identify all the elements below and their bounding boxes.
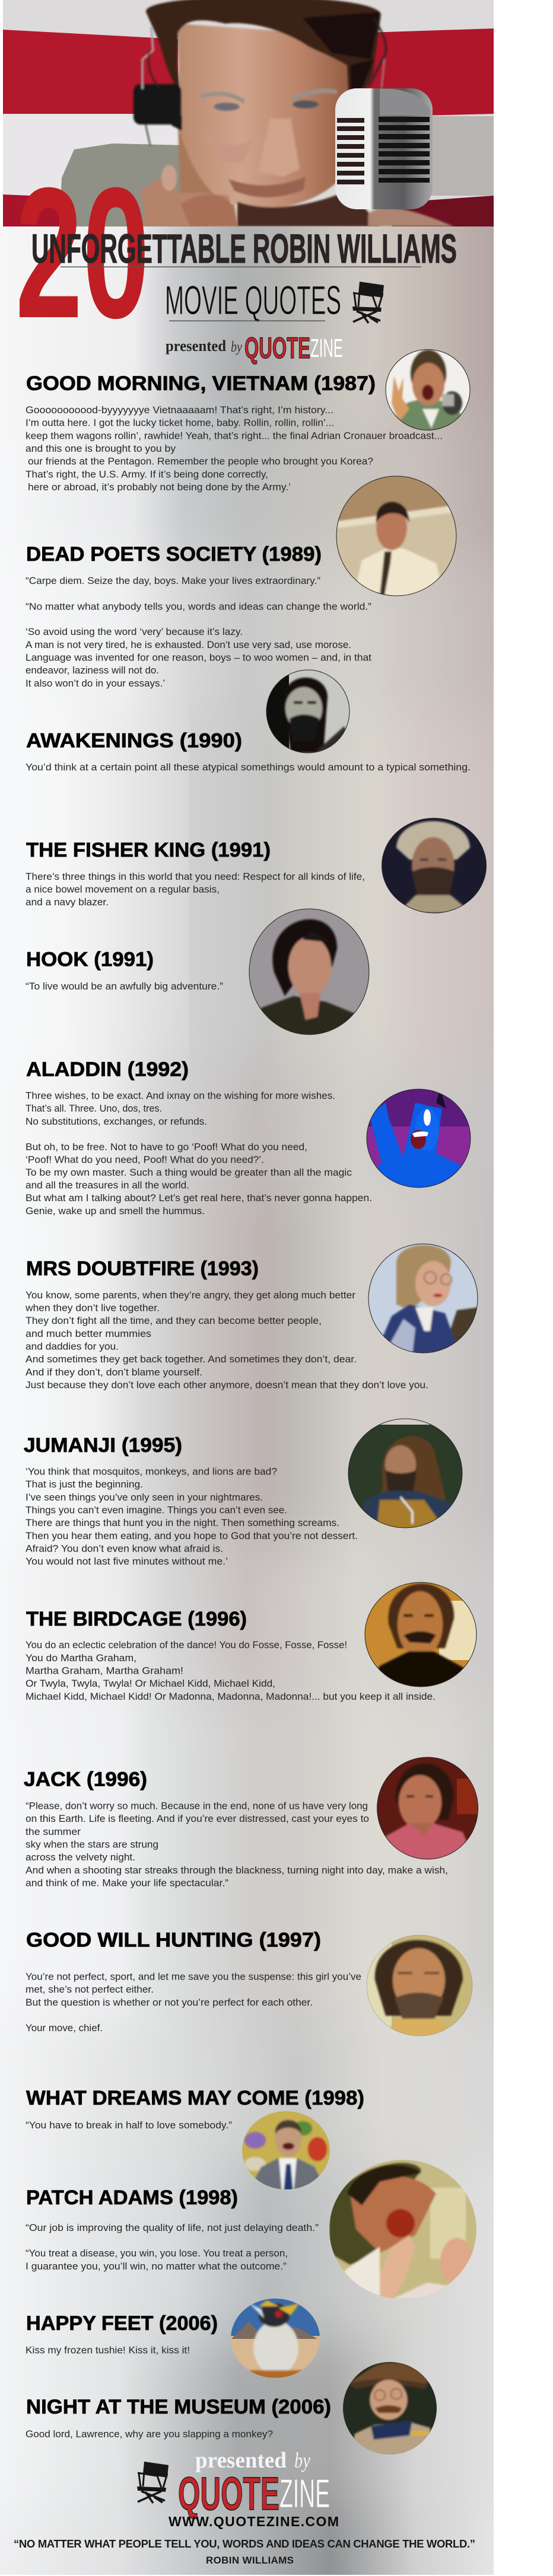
- quote text: [26, 1466, 358, 1567]
- quote text: And sometimes they get back together. And sometimes they don’t, dear.: [26, 1354, 357, 1365]
- section: jack: [24, 1755, 481, 1889]
- quote text: across the velvety night.: [26, 1852, 135, 1863]
- quote text: It also won’t do in your essays.’: [26, 678, 165, 689]
- portrait: good morning vietnam: [386, 349, 470, 430]
- section: night at the museum: [26, 2360, 439, 2457]
- portrait: jumanji: [347, 1417, 466, 1530]
- quote text: A man is not very tired, he is exhausted. Don’t use very sad, use morose.: [26, 639, 351, 650]
- presented by quotezine logo (top): ZINE: [310, 334, 343, 363]
- quote text: [26, 1090, 372, 1217]
- quote text: ‘Poof! What do you need, Poof! What do you need?’.: [26, 1154, 264, 1166]
- microphone: [335, 88, 433, 209]
- website url: WWW.QUOTEZINE.COM: [169, 2514, 339, 2529]
- quote text: Michael Kidd, Michael Kidd! Or Madonna, Madonna, Madonna!... but you keep it all inside.: [26, 1691, 436, 1702]
- portrait: the fisher king: [380, 815, 490, 916]
- portrait: good will hunting: [365, 1933, 475, 2039]
- quote text: Just because they don’t love each other anymore, doesn’t mean that they don’t love you.: [26, 1380, 428, 1391]
- quote text: here or abroad, it’s probably not being done by the Army.’: [28, 481, 291, 493]
- big red number 20: 20: [15, 149, 150, 357]
- quote text: You’d think at a certain point all these atypical somethings would amount to a typical something.: [26, 761, 471, 773]
- quote text: To be my own master. Such a thing would be greater than all the magic: [26, 1167, 352, 1178]
- quote text: You know, some parents, when they’re angry, they get along much better: [26, 1289, 355, 1301]
- footer logo: presented by quotezine: by: [294, 2449, 310, 2472]
- closing quote: “NO MATTER WHAT PEOPLE TELL YOU, WORDS AND IDEAS CAN CHANGE THE WORLD.”: [14, 2537, 475, 2550]
- quote text: I’ve seen things you’ve only seen in your nightmares.: [26, 1492, 263, 1503]
- section: aladdin: [26, 1058, 472, 1217]
- quote text: But oh, to be free. Not to have to go ‘Poof! What do you need,: [26, 1141, 307, 1153]
- presented by quotezine logo (top): QUOTE: [244, 331, 310, 365]
- portrait: night at the museum: [341, 2360, 439, 2457]
- section: mrs doubtfire: [25, 1242, 479, 1391]
- closing attribution: ROBIN WILLIAMS: [206, 2555, 294, 2566]
- section: jumanji: [24, 1417, 466, 1567]
- quote text: and this one is brought to you by: [26, 443, 176, 454]
- portrait: aladdin genie: [365, 1088, 472, 1189]
- quote text: You do an eclectic celebration of the dance! You do Fosse, Fosse, Fosse!: [26, 1639, 347, 1651]
- heading: THE FISHER KING (1991): [26, 839, 271, 861]
- quote text: Gooooooooood-byyyyyyye Vietnaaaaam! That’s right, I’m history...: [26, 404, 333, 416]
- quote text: You would not last five minutes without me.’: [26, 1556, 228, 1567]
- quote text: Kiss my frozen tushie! Kiss it, kiss it!: [26, 2344, 190, 2356]
- section: happy feet: [26, 2297, 323, 2380]
- quote text: our friends at the Pentagon. Remember the people who brought you Korea?: [28, 456, 373, 467]
- heading: ALADDIN (1992): [26, 1058, 189, 1081]
- quote text: [26, 1639, 436, 1702]
- quote text: on this Earth. Life is fleeting. And if you’re ever distressed, cast your eyes to: [26, 1813, 369, 1824]
- quote text: “You have to break in half to love somebody.”: [26, 2119, 232, 2131]
- section: awakenings: [26, 667, 471, 773]
- quote text: [26, 404, 443, 493]
- portrait: jack: [375, 1755, 481, 1862]
- quote text: Genie, wake up and smell the hummus.: [26, 1205, 205, 1217]
- quote text: Your move, chief.: [26, 2022, 103, 2034]
- portrait: happy feet penguin: [228, 2297, 323, 2380]
- quote text: But the question is whether or not you’re perfect for each other.: [26, 1997, 313, 2008]
- quote text: There’s three things in this world that you need: Respect for all kinds of life,: [26, 871, 365, 882]
- footer logo: presented by quotezine: presented: [195, 2448, 287, 2473]
- section: the birdcage: [26, 1580, 481, 1702]
- heading: JACK (1996): [24, 1769, 147, 1791]
- heading: THE BIRDCAGE (1996): [26, 1608, 247, 1630]
- quote text: keep them wagons rollin’, rawhide! Yeah, that’s right... the final Adrian Cronauer broadcast...: [26, 430, 443, 441]
- quote text: That’s right, the U.S. Army. If it’s being done correctly,: [26, 468, 268, 480]
- quote text: [26, 871, 365, 908]
- quote text: Then you hear them eating, and you hope to God that you’re not dessert.: [26, 1530, 358, 1541]
- quote text: But what am I talking about? Let’s get real here, that’s never gonna happen.: [26, 1192, 372, 1204]
- quote text: a nice bowel movement on a regular basis,: [26, 884, 220, 895]
- heading: WHAT DREAMS MAY COME (1998): [26, 2087, 364, 2109]
- quote text: [26, 575, 371, 689]
- heading: HAPPY FEET (2006): [26, 2312, 218, 2335]
- quote text: I’m outta here. I got the lucky ticket home, baby. Rollin, rollin, rollin’...: [26, 417, 334, 429]
- icon: director chair (footer): [137, 2462, 169, 2503]
- quote text: That is just the beginning.: [26, 1479, 143, 1490]
- quote text: “Our job is improving the quality of life, not just delaying death.”: [26, 2222, 319, 2233]
- quote text: Three wishes, to be exact. And ixnay on the wishing for more wishes.: [26, 1090, 335, 1102]
- footer logo: presented by quotezine: ZINE: [279, 2471, 330, 2516]
- quote text: the summer: [26, 1826, 81, 1837]
- heading: HOOK (1991): [26, 949, 154, 971]
- quote text: ‘You think that mosquitos, monkeys, and lions are bad?: [26, 1466, 277, 1477]
- quote text: when they don’t live together.: [25, 1303, 160, 1314]
- quote text: Or Twyla, Twyla, Twyla! Or Michael Kidd, Michael Kidd,: [26, 1678, 275, 1689]
- quote text: [26, 2222, 319, 2272]
- heading: DEAD POETS SOCIETY (1989): [26, 543, 322, 566]
- heading: AWAKENINGS (1990): [26, 730, 242, 752]
- section: dead poets society: [26, 474, 463, 689]
- quote text: [26, 1971, 361, 2034]
- quote text: Language was invented for one reason, boys – to woo women – and, in that: [26, 652, 371, 663]
- quote text: “To live would be an awfully big adventure.”: [26, 981, 223, 992]
- quote text: “No matter what anybody tells you, words and ideas can change the world.”: [26, 601, 371, 612]
- quote text: [25, 1289, 428, 1391]
- heading: JUMANJI (1995): [24, 1434, 182, 1457]
- section: hook: [26, 907, 372, 1038]
- presented by quotezine logo (top): by: [231, 339, 243, 355]
- quote text: met, she’s not perfect either.: [26, 1984, 154, 1995]
- quote text: I guarantee you, you’ll win, no matter what the outcome.”: [26, 2261, 287, 2272]
- quote text: and a navy blazer.: [26, 896, 109, 908]
- presented by quotezine logo (top): presented: [166, 337, 226, 355]
- subtitle: movie quotes: MOVIE QUOTES: [165, 277, 341, 323]
- section: good will hunting: [26, 1929, 475, 2039]
- quote text: and think of me. Make your life spectacular.”: [26, 1878, 228, 1889]
- icon: director chair: [352, 282, 384, 323]
- quote text: sky when the stars are strung: [26, 1839, 158, 1850]
- quote text: Things you can’t even imagine. Things you can’t even see.: [26, 1505, 287, 1516]
- quote text: And when a shooting star streaks through the blackness, turning night into day, make a wish,: [26, 1865, 448, 1876]
- heading: GOOD MORNING, VIETNAM (1987): [26, 372, 376, 395]
- quote text: and daddies for you.: [26, 1341, 119, 1352]
- heading: PATCH ADAMS (1998): [26, 2186, 238, 2209]
- quote text: and all the treasures in all the world.: [26, 1180, 189, 1190]
- quote text: “Carpe diem. Seize the day, boys. Make your lives extraordinary.”: [26, 575, 320, 586]
- section: patch adams: [26, 2158, 481, 2300]
- heading: NIGHT AT THE MUSEUM (2006): [26, 2396, 331, 2418]
- portrait: dead poets society: [336, 475, 457, 596]
- quote text: Afraid? You don’t even know what afraid is.: [26, 1543, 223, 1554]
- heading: GOOD WILL HUNTING (1997): [26, 1929, 321, 1952]
- section: what dreams may come: [26, 2087, 364, 2192]
- section: the fisher king: [26, 815, 490, 916]
- quote text: They don’t fight all the time, and they can become better people,: [26, 1315, 322, 1326]
- quote text: You’re not perfect, sport, and let me save you the suspense: this girl you’ve: [26, 1971, 361, 1983]
- quote text: No substitutions, exchanges, or refunds.: [26, 1116, 207, 1127]
- heading: MRS DOUBTFIRE (1993): [26, 1257, 259, 1280]
- quote text: Martha Graham, Martha Graham!: [26, 1665, 183, 1677]
- quote text: ‘So avoid using the word ‘very’ because it’s lazy.: [26, 626, 243, 637]
- footer logo: presented by quotezine: QUOTE: [178, 2467, 279, 2520]
- quote text: And if they don’t, don’t blame yourself.: [26, 1367, 202, 1378]
- portrait: awakenings: [266, 670, 350, 753]
- portrait: hook: [246, 907, 372, 1038]
- quote text: endeavor, laziness will not do.: [26, 665, 159, 676]
- quote text: You do Martha Graham,: [26, 1652, 136, 1664]
- presented by quotezine logo (top): [166, 331, 343, 365]
- portrait: the birdcage: [363, 1580, 481, 1690]
- quote text: Good lord, Lawrence, why are you slapping a monkey?: [26, 2428, 273, 2440]
- quote text: There are things that hunt you in the night. Then something screams.: [26, 1517, 339, 1528]
- quote text: and much better mummies: [26, 1328, 151, 1339]
- quote text: That’s all. Three. Uno, dos, tres.: [26, 1103, 162, 1114]
- portrait: mrs doubtfire: [367, 1242, 479, 1355]
- portrait: what dreams may come: [240, 2109, 332, 2192]
- quote text: “Please, don’t worry so much. Because in the end, none of us have very long: [26, 1800, 368, 1812]
- quote text: “You treat a disease, you win, you lose. You treat a person,: [26, 2248, 288, 2259]
- quote text: [26, 1800, 448, 1889]
- section: good morning vietnam: [26, 344, 475, 493]
- footer logo: presented by quotezine: [178, 2448, 330, 2520]
- hero photo: Robin Williams with headphones and microphone: [3, 0, 494, 226]
- portrait: patch adams: [326, 2158, 481, 2300]
